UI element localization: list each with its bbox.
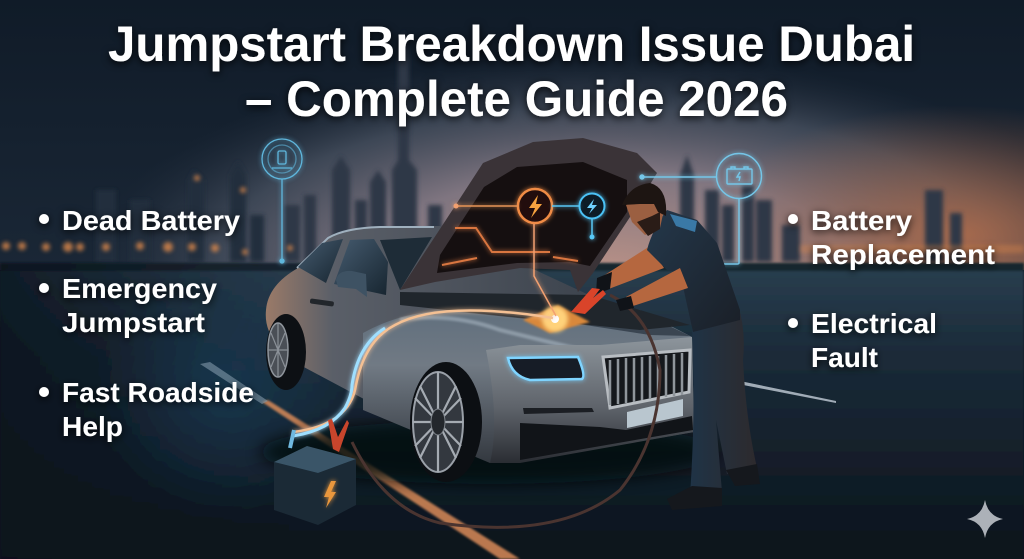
- car grille: [603, 350, 690, 408]
- mechanic head and beard: [622, 183, 666, 236]
- bullet: Electrical Fault: Fault: [811, 342, 878, 373]
- car body side: [266, 226, 600, 445]
- bullet: Emergency Jumpstart: [39, 273, 217, 338]
- mechanic boots: [667, 464, 760, 510]
- mechanic back arm: [600, 246, 664, 290]
- electric arc from battery to engine: [293, 310, 553, 436]
- bullet: Fast Roadside Help: Fast Roadside: [62, 377, 254, 408]
- hood glowing trace: [442, 228, 578, 265]
- bullet: Electrical Fault: Electrical: [811, 308, 937, 339]
- engine bay: [400, 292, 690, 333]
- bullet: Fast Roadside Help: Help: [62, 411, 123, 442]
- car front wheel: [410, 362, 482, 482]
- bullet: Fast Roadside Help: [39, 377, 254, 442]
- portable car battery: [274, 419, 356, 525]
- car lower intake: [520, 416, 693, 460]
- background: blurred city lights: [2, 175, 1024, 255]
- circuit connector lines: [454, 204, 594, 316]
- mechanic shoulder patch: [670, 214, 697, 232]
- icon: car battery callout, upper right: [640, 154, 762, 264]
- title line 1: Jumpstart Breakdown Issue Dubai: [108, 16, 915, 72]
- mechanic legs: [690, 305, 757, 496]
- car rear wheel: [266, 314, 306, 390]
- title: [108, 16, 915, 127]
- icon: sparkle watermark: [967, 500, 1003, 538]
- car: [266, 226, 694, 482]
- orange lightning icon: [518, 189, 552, 223]
- car hood and fender: [363, 300, 694, 463]
- bullet: Emergency Jumpstart: Emergency: [62, 273, 217, 304]
- mechanic: [596, 183, 760, 510]
- background: wet road surface: [0, 263, 1024, 559]
- bullet: Battery Replacement: [788, 205, 995, 270]
- icon: battery charge callout, upper left: [262, 139, 302, 263]
- car front fascia: [486, 337, 694, 463]
- background: blurred skyline, left: [96, 161, 264, 262]
- car shadow: [260, 420, 720, 484]
- mechanic front arm: [626, 268, 688, 307]
- red jumper clamp on engine: [571, 288, 606, 314]
- car side windows: [298, 237, 432, 295]
- car door handle and mirror: [310, 271, 367, 307]
- bullet: Emergency Jumpstart: Jumpstart: [62, 307, 205, 338]
- bullet: Electrical Fault: [788, 308, 937, 373]
- car bumper slot: [523, 408, 594, 414]
- open hood: [400, 138, 657, 292]
- right bullet list: [788, 205, 995, 373]
- background: dusk sky: [0, 0, 1024, 270]
- background: blurred skyline, centre and right: [284, 30, 962, 262]
- car shoulder highlight: [400, 318, 590, 352]
- bullet: Dead Battery: Dead Battery: [62, 205, 240, 236]
- bullet: Battery Replacement: Battery: [811, 205, 912, 236]
- road marking: glowing lane line: [200, 362, 836, 559]
- title line 2: – Complete Guide 2026: [245, 71, 788, 127]
- car number plate: [627, 399, 683, 428]
- jumper cable from battery to engine: [352, 295, 660, 527]
- left bullet list: [39, 205, 254, 442]
- car roof trim: [297, 227, 434, 268]
- clamp cable arc on battery: [290, 430, 294, 448]
- hood outer panel: [400, 138, 657, 292]
- car hood dark surface: [450, 300, 690, 336]
- blue lightning icon: [580, 194, 604, 218]
- car headlight: [508, 357, 583, 380]
- mechanic gloves: [596, 272, 634, 311]
- hood inner dark: [437, 162, 627, 273]
- bullet: Battery Replacement: Replacement: [811, 239, 995, 270]
- mechanic torso: [647, 210, 740, 332]
